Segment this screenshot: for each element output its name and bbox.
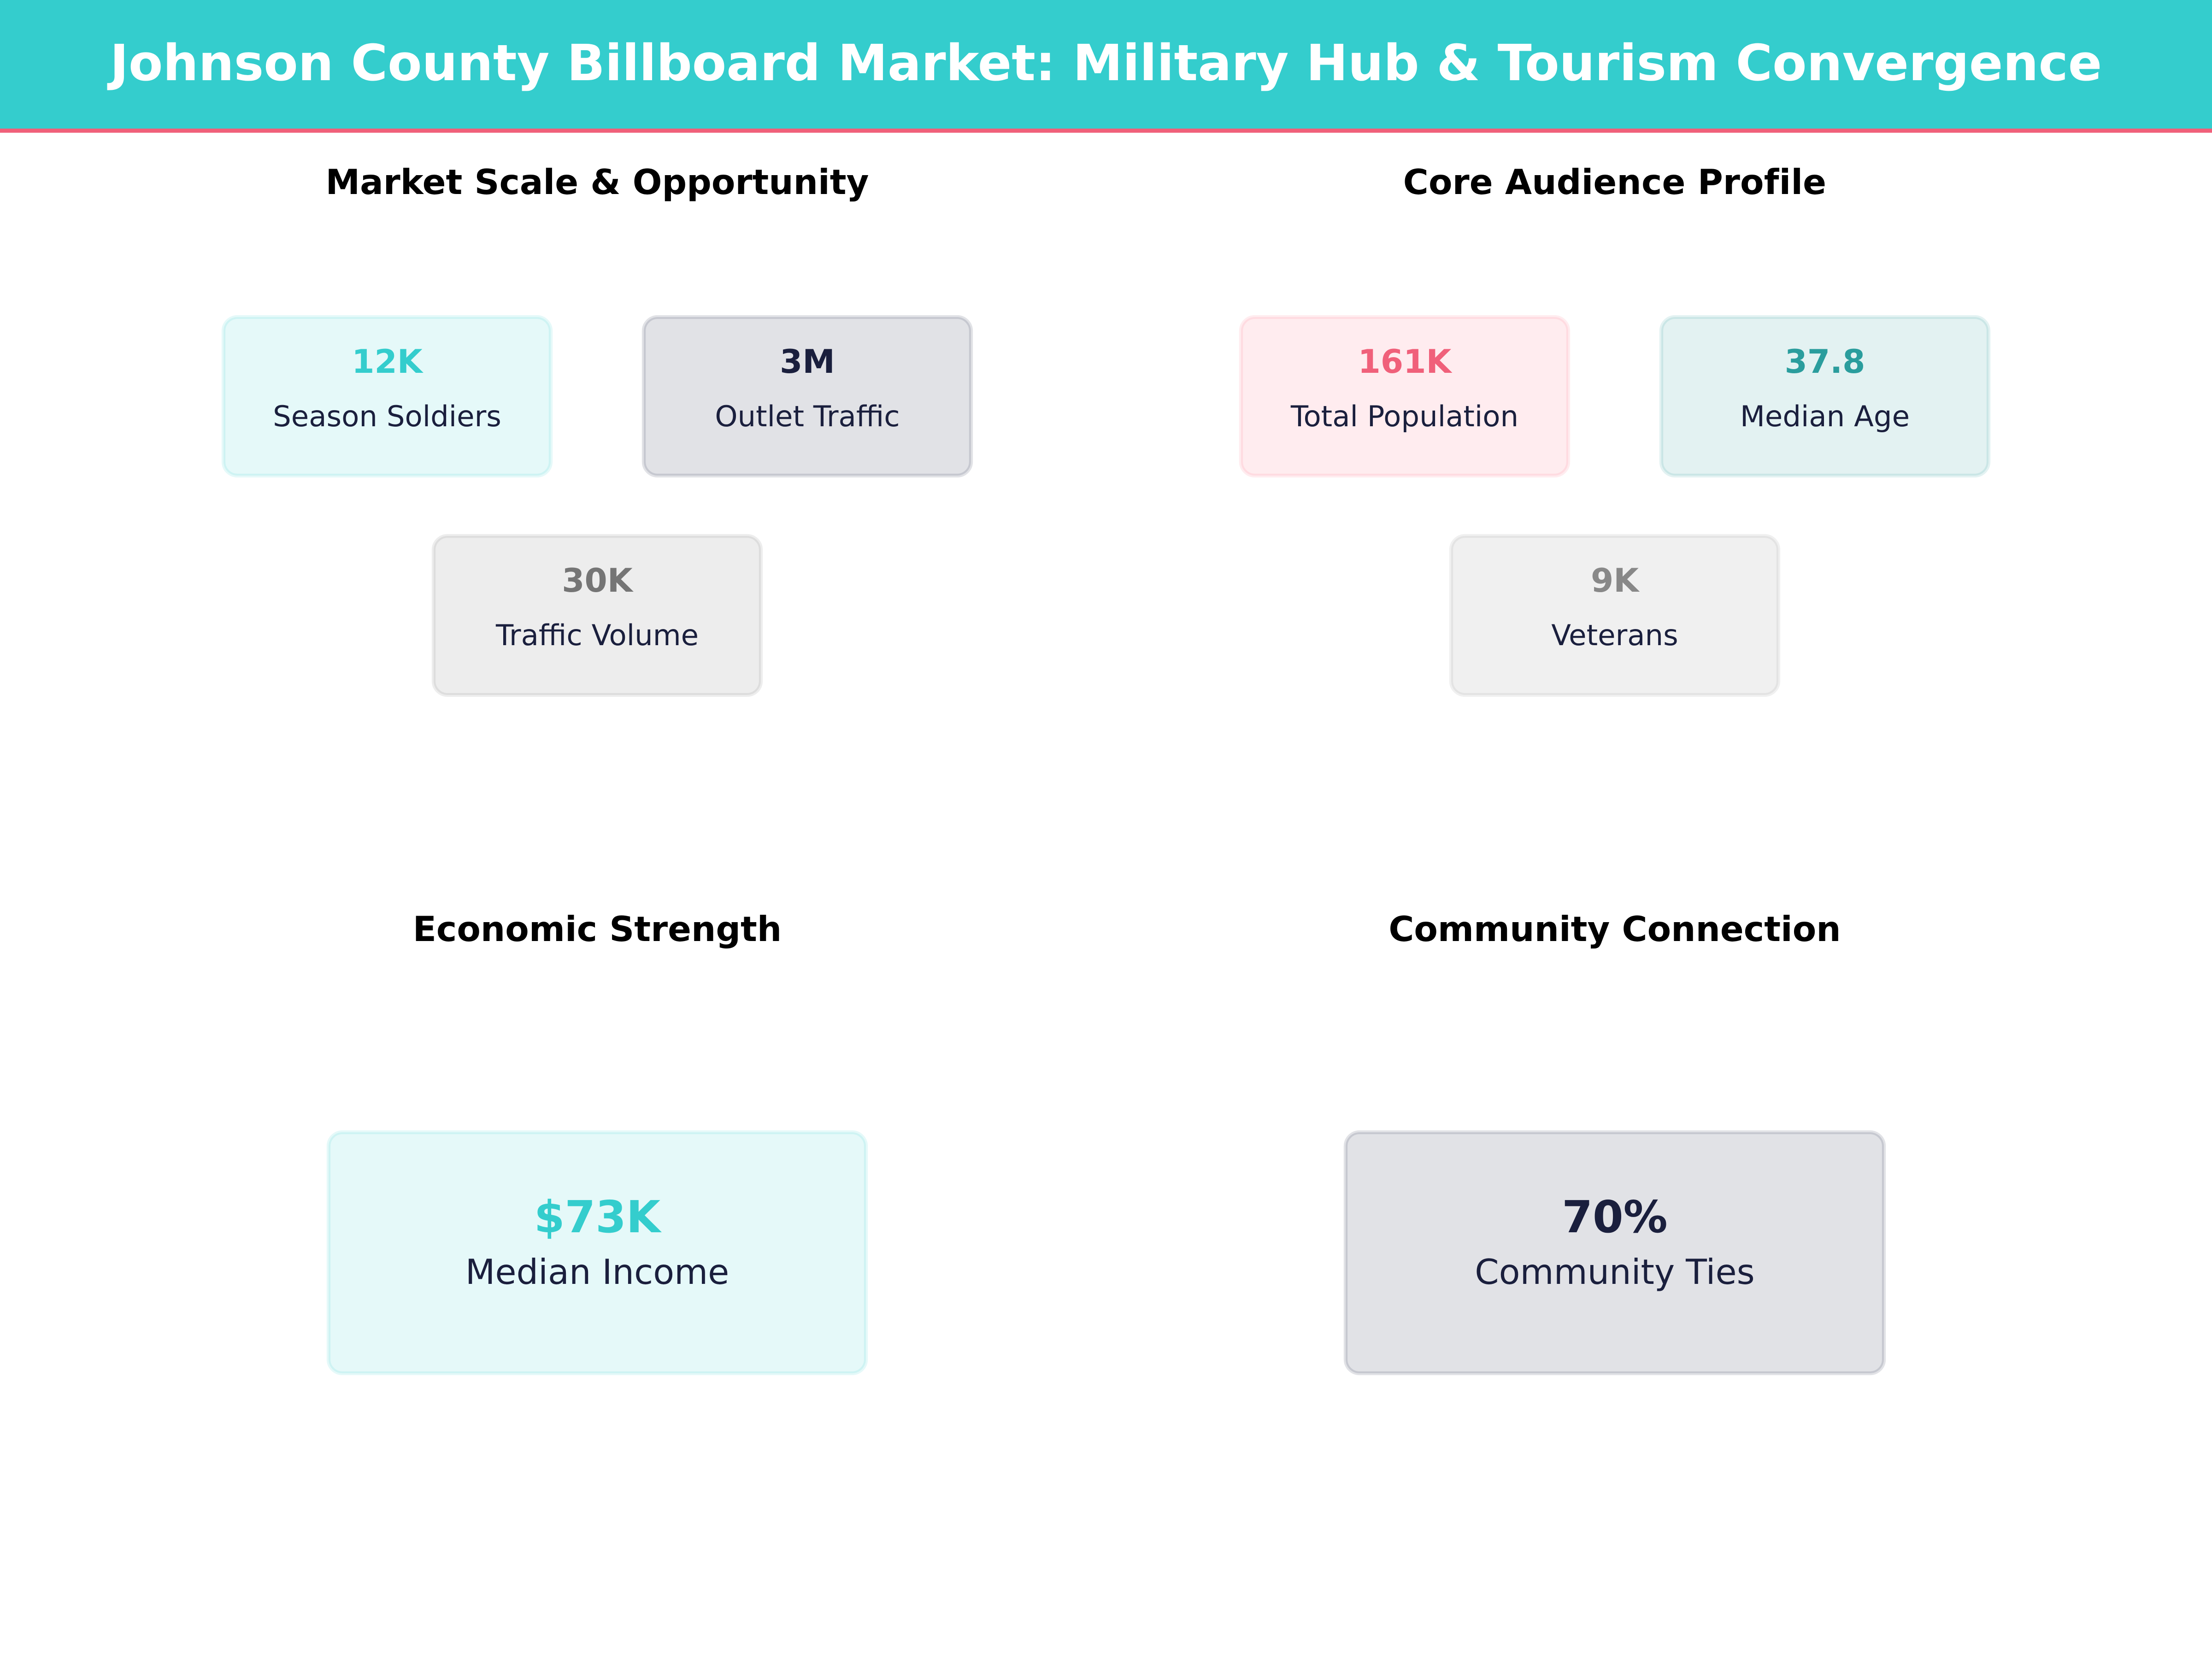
card: traffic volume: Traffic Volume	[495, 618, 699, 652]
card: season soldiers: Season Soldiers	[273, 400, 501, 433]
heading: economic strength: Economic Strength	[413, 909, 782, 949]
card: median age	[1661, 317, 1988, 476]
card: outlet traffic: 3M	[780, 342, 835, 381]
card: season soldiers: 12K	[352, 342, 424, 381]
title: Johnson County Billboard Market: Military Hub & Tourism Convergence	[107, 34, 2102, 92]
card: community ties: 70%	[1562, 1191, 1668, 1243]
card: median income	[329, 1132, 866, 1373]
card: outlet traffic: Outlet Traffic	[715, 400, 900, 433]
panel: market scale and opportunity	[224, 162, 971, 695]
card: veterans: Veterans	[1551, 618, 1678, 652]
panel: community connection	[1346, 909, 1884, 1373]
card: total population	[1241, 317, 1568, 476]
card: total population: 161K	[1358, 342, 1452, 381]
heading: community connection: Community Connection	[1388, 909, 1841, 949]
card: median age: Median Age	[1740, 400, 1910, 433]
card: median income: $73K	[534, 1191, 662, 1243]
card: community ties	[1346, 1132, 1884, 1373]
card: total population: Total Population	[1290, 400, 1518, 433]
card: season soldiers	[224, 317, 551, 476]
card: outlet traffic	[644, 317, 971, 476]
card: median income: Median Income	[465, 1252, 729, 1292]
card: veterans	[1451, 536, 1778, 695]
card: traffic volume	[434, 536, 761, 695]
card: traffic volume: 30K	[562, 561, 634, 600]
heading: market scale: Market Scale & Opportunity	[326, 162, 869, 202]
panel: core audience profile	[1241, 162, 1988, 695]
card: veterans: 9K	[1591, 561, 1640, 600]
heading: core audience: Core Audience Profile	[1403, 162, 1826, 202]
card: median age: 37.8	[1785, 342, 1865, 381]
header banner	[0, 0, 2212, 133]
panel: economic strength	[329, 909, 866, 1373]
card: community ties: Community Ties	[1475, 1252, 1755, 1292]
